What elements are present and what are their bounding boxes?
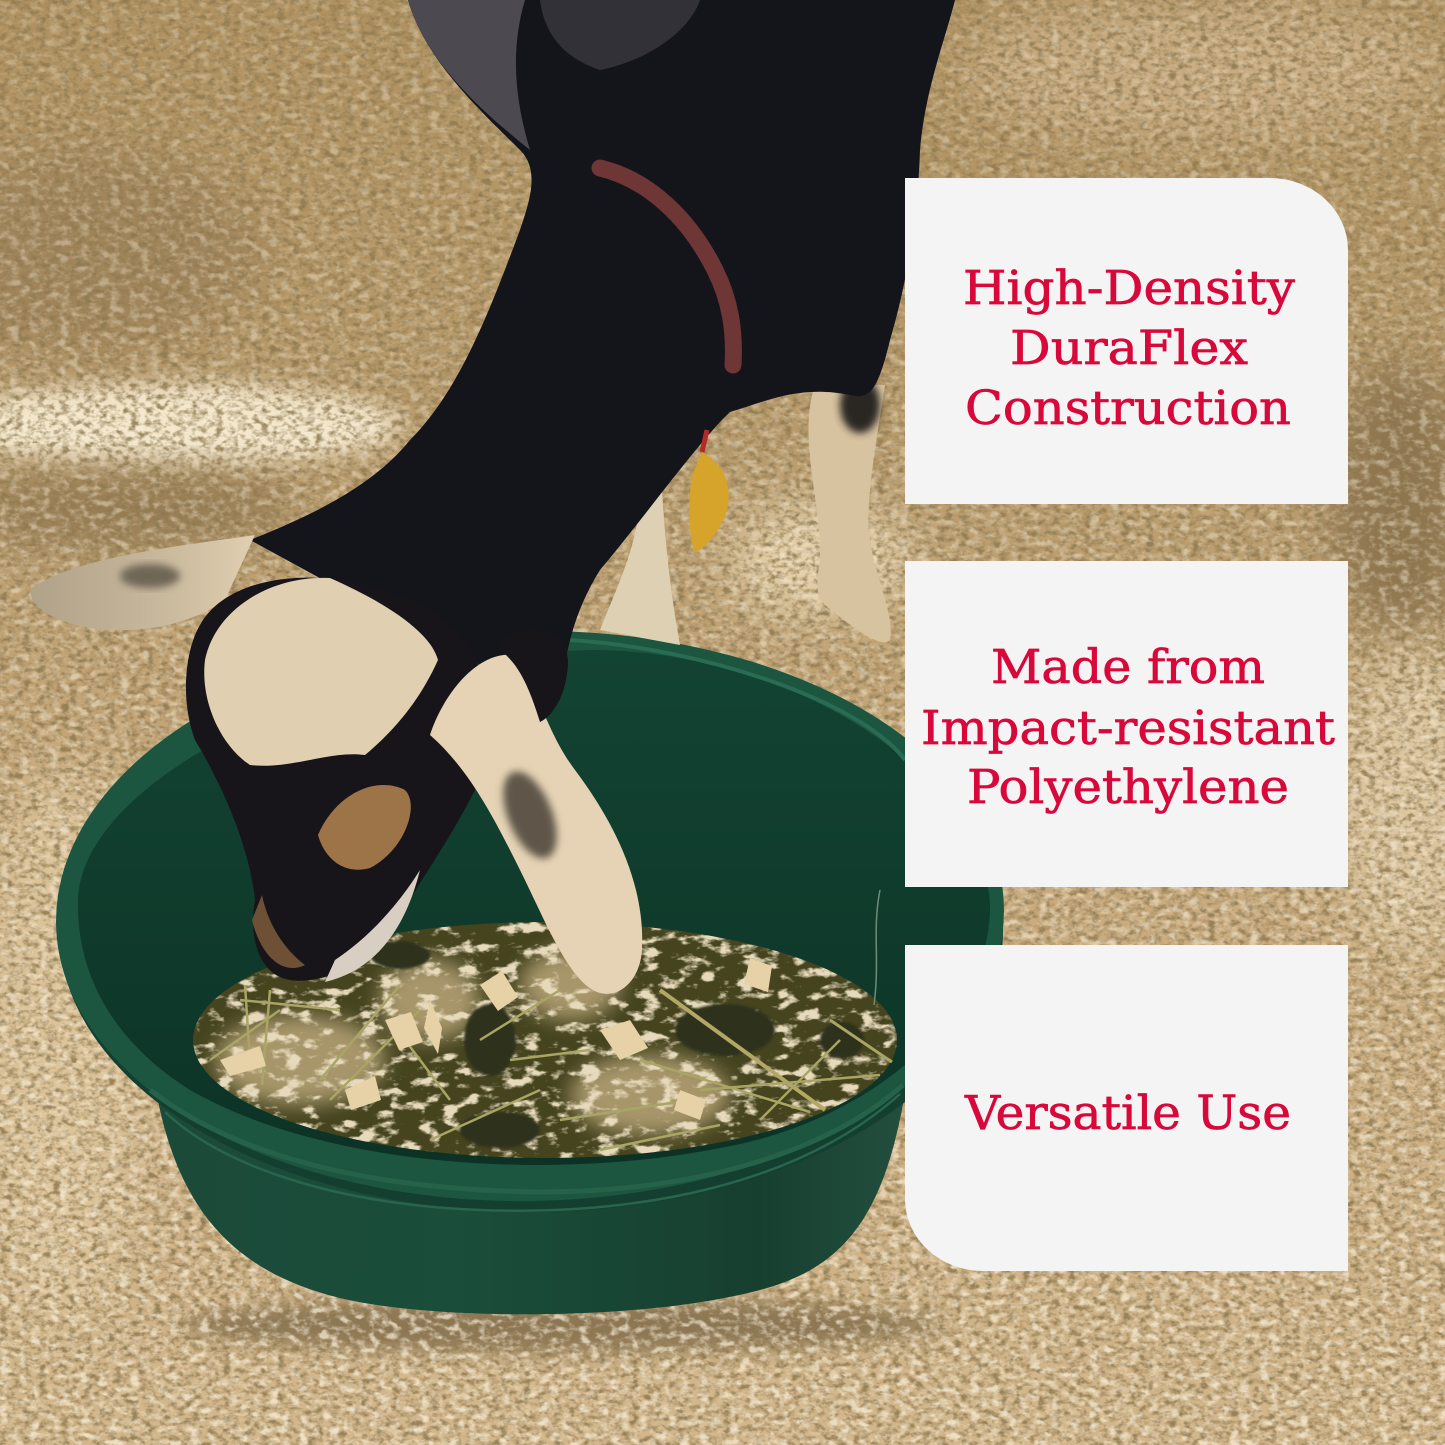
pan inner crack [874,890,880,1005]
heading text: panel 3: Versatile Use [964,1086,1291,1141]
goat rear leg [809,385,891,642]
goat head [186,578,486,981]
heading text: panel 2: Made from [991,640,1265,695]
goat tag [689,452,729,552]
goat body [250,0,955,700]
heading text: panel 2: Impact-resistant [921,701,1335,756]
heading text: panel 1: Construction [965,381,1291,436]
goat muzzle marks [318,785,411,870]
pan front rim highlight [150,1085,903,1192]
pan floor with hay [190,920,900,1160]
green feed pan [51,623,1009,1314]
panel: Versatile Use [905,945,1348,1271]
pan lip underside [59,648,1003,1212]
goat [31,0,955,994]
heading text: panel 1 [963,261,1295,436]
panel: High-Density DuraFlex Construction [905,178,1348,504]
heading text: panel 1: High-Density [963,261,1295,316]
pan rim [51,623,1009,1209]
pan outer base [155,1060,910,1314]
panel: Made from Impact-resistant Polyethylene [905,561,1348,887]
heading text: panel 1: DuraFlex [1010,321,1248,376]
goat left ear [31,535,255,630]
ear base black [500,630,568,722]
goat forehead patch [204,578,438,766]
heading text: panel 2: Polyethylene [967,760,1289,815]
goat right ear [430,655,642,994]
pan interior [78,650,990,1165]
goat front leg [600,490,680,645]
heading text: panel 2 [921,640,1335,815]
